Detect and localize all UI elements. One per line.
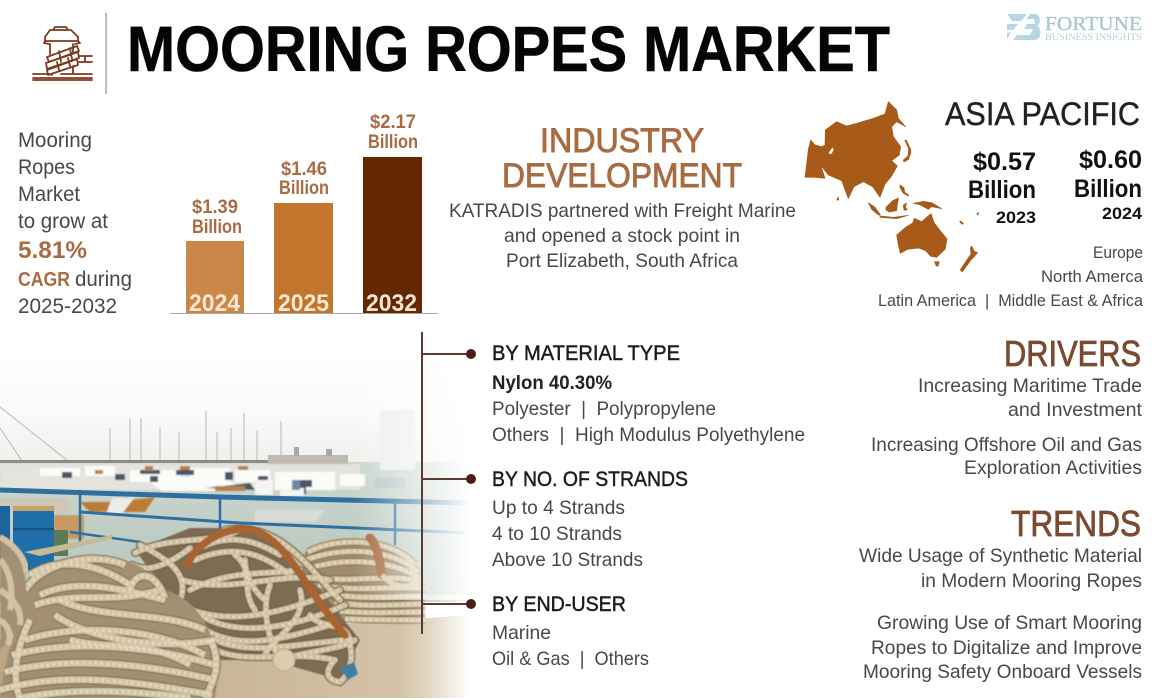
bar 2025 <box>274 159 333 317</box>
text: industry development detail: and opened a stock point in <box>504 225 740 247</box>
segment: by end-user: BY END-USER <box>492 593 626 616</box>
bar 2025: 2025 <box>278 290 329 317</box>
rope pile: right coil <box>300 538 425 622</box>
growth summary text: to grow at <box>18 210 108 233</box>
bar 2024: Billion <box>192 217 242 238</box>
rope pile: left coil <box>0 556 217 698</box>
other regions list <box>878 243 1144 310</box>
value: 2024: 2024 <box>1102 204 1143 223</box>
growth summary text <box>18 129 132 318</box>
rope pile: far-left coil <box>0 535 26 650</box>
text: industry development detail: KATRADIS partnered with Freight Marine <box>449 200 796 222</box>
segment: by number of strands: BY NO. OF STRANDS <box>492 468 688 491</box>
moored boats <box>0 464 405 539</box>
segment: by number of strands: 4 to 10 Strands <box>492 523 622 545</box>
segment: by material type: Nylon 40.30% <box>492 372 612 394</box>
other regions list: North Amerca <box>1041 267 1144 286</box>
panel: drivers: and Investment <box>1008 399 1143 421</box>
value: 2024: $0.60 <box>1079 146 1142 174</box>
panel: trends: Wide Usage of Synthetic Material <box>859 545 1142 567</box>
segment: by number of strands: Up to 4 Strands <box>492 497 625 519</box>
growth summary text: CAGR <box>18 269 70 291</box>
barrels <box>13 506 54 570</box>
photo fades <box>360 410 470 600</box>
panel: drivers: Increasing Offshore Oil and Gas <box>871 434 1142 456</box>
segment: by material type <box>492 342 805 446</box>
text: industry development detail: Port Elizabeth, South Africa <box>506 250 738 272</box>
other regions list: Latin America | Middle East & Africa <box>878 291 1144 310</box>
bar chart: market size <box>170 112 438 317</box>
growth summary text: 2025-2032 <box>18 295 117 318</box>
heading: industry development: INDUSTRY <box>540 122 704 160</box>
photo: coiled mooring ropes at a marina <box>0 406 466 698</box>
bar 2024: 2024 <box>189 290 241 317</box>
growth summary text: Market <box>18 183 80 206</box>
growth summary text: 5.81% <box>18 237 87 264</box>
distant trees <box>380 410 415 470</box>
bar 2032: 2032 <box>366 290 417 317</box>
bar 2024: $1.39 <box>192 197 238 218</box>
other regions list: Europe <box>1093 243 1143 262</box>
ground <box>0 615 470 700</box>
value: 2023: Billion <box>968 176 1036 204</box>
icon: mooring bollard with rope <box>33 27 92 80</box>
title: MOORING ROPES MARKET <box>127 13 890 85</box>
growth summary text: during <box>75 268 132 291</box>
bar 2032 <box>363 112 422 317</box>
text: industry development detail <box>449 200 796 272</box>
segment: by end-user: Marine <box>492 622 551 644</box>
heading: industry development <box>502 122 742 195</box>
logo: Fortune Business Insights <box>1007 13 1142 43</box>
blue railings <box>0 490 470 545</box>
panel: drivers: Increasing Maritime Trade <box>918 375 1142 397</box>
panel: trends: Ropes to Digitalize and Improve <box>871 637 1142 659</box>
logo: Fortune Business Insights: BUSINESS INSIGHTS <box>1045 33 1142 43</box>
panel: trends: Mooring Safety Onboard Vessels <box>863 661 1142 683</box>
heading: Asia Pacific: ASIA PACIFIC <box>945 96 1140 132</box>
growth summary text: Ropes <box>18 156 75 179</box>
heading: industry development: DEVELOPMENT <box>502 157 742 195</box>
bar 2025: Billion <box>279 178 329 199</box>
bar 2025: $1.46 <box>281 159 327 180</box>
panel: drivers: Exploration Activities <box>964 457 1142 479</box>
value: 2023: 2023 <box>996 208 1036 227</box>
value: 2023 <box>968 148 1036 227</box>
panel: trends: in Modern Mooring Ropes <box>921 570 1142 592</box>
panel: trends: Growing Use of Smart Mooring <box>877 612 1142 634</box>
segment: by number of strands: Above 10 Strands <box>492 549 643 571</box>
growth summary text: Mooring <box>18 129 92 152</box>
value: 2024 <box>1074 146 1143 223</box>
segment: by number of strands <box>492 468 688 571</box>
segment: by material type: Polyester | Polypropylene <box>492 398 716 420</box>
segment: by end-user: Oil & Gas | Others <box>492 648 649 670</box>
bar 2032: Billion <box>368 132 418 153</box>
segment: by end-user <box>492 593 649 670</box>
panel: drivers: DRIVERS <box>1004 333 1141 374</box>
bar 2032: $2.17 <box>370 112 416 133</box>
panel: trends <box>859 503 1142 683</box>
segment: by material type: BY MATERIAL TYPE <box>492 342 680 365</box>
logo: Fortune Business Insights: FORTUNE <box>1045 13 1142 35</box>
map: Asia Pacific <box>805 102 979 272</box>
value: 2024: Billion <box>1074 175 1142 203</box>
panel: trends: TRENDS <box>1011 503 1141 544</box>
value: 2023: $0.57 <box>973 148 1036 176</box>
segment: by material type: Others | High Modulus Polyethylene <box>492 424 805 446</box>
bar 2024 <box>186 197 244 317</box>
connector: segment tree <box>421 332 476 634</box>
panel: drivers <box>871 333 1143 479</box>
rope pile: centre tangle <box>132 528 360 682</box>
divider <box>105 13 107 94</box>
